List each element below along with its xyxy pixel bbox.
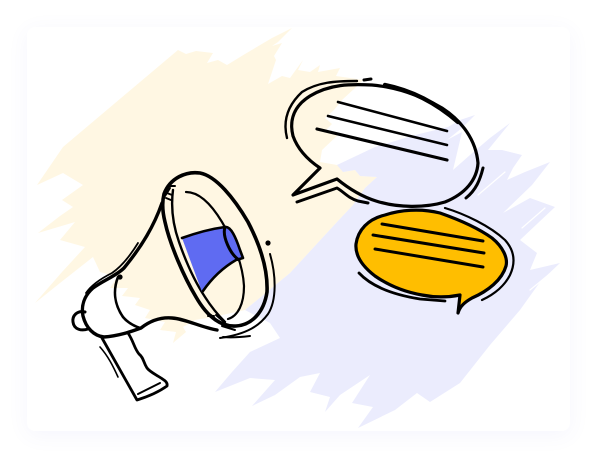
rim scribbles	[165, 186, 235, 330]
cream brush stroke	[35, 28, 377, 343]
megaphone	[73, 173, 275, 400]
right sketch lines	[220, 254, 275, 338]
second bubble text lines	[373, 224, 484, 267]
white brush slivers	[281, 48, 552, 290]
megaphone body	[82, 203, 217, 337]
second speech bubble	[356, 208, 513, 313]
panel: white card	[27, 27, 570, 431]
megaphone knob	[73, 312, 88, 330]
megaphone rim	[163, 173, 267, 326]
cone mouth	[224, 227, 239, 260]
small dot	[265, 240, 271, 246]
first speech bubble	[286, 79, 483, 206]
megaphone back seam	[115, 277, 140, 328]
body sketch lines	[86, 243, 138, 293]
rim inner edge	[172, 190, 225, 322]
cone outline	[182, 227, 243, 291]
blue speaker cone	[182, 227, 243, 292]
megaphone handle	[100, 333, 167, 400]
first bubble text lines	[317, 102, 447, 160]
inner cone ellipse	[186, 192, 244, 319]
lavender brush stroke	[215, 115, 560, 428]
seam joint dot	[117, 274, 123, 280]
